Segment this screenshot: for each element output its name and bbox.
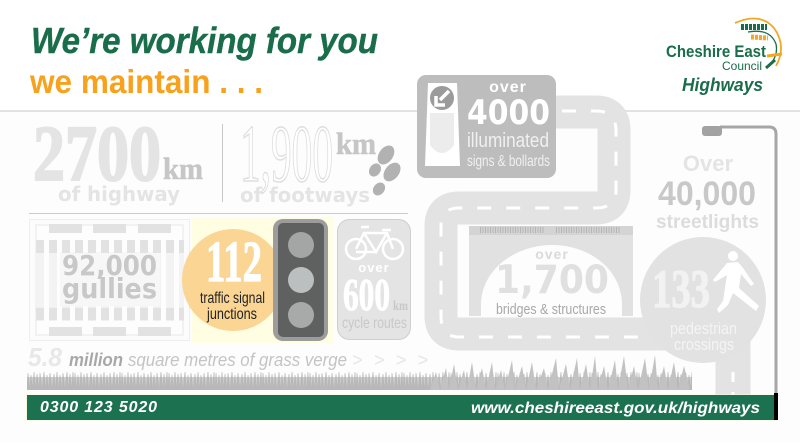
panel: 1,900km of footways: of footways	[240, 183, 370, 207]
panel: 40,000 streetlights: 40,000	[658, 175, 756, 213]
panel: 1,700 bridges and structures: bridges & structures	[496, 301, 606, 318]
panel: illuminated signs and bollards: 4000	[467, 93, 550, 133]
panel: 40,000 streetlights	[656, 151, 759, 233]
panel: 600km cycle routes: cycle routes	[342, 315, 407, 332]
panel: 112 traffic signal junctions: traffic signal	[200, 290, 265, 307]
title: We’re working for you	[31, 20, 378, 61]
footer bar: www.cheshireeast.gov.uk/highways	[471, 400, 760, 417]
icon: street light	[702, 126, 778, 420]
panel: 1,700 bridges and structures: 1,700	[495, 258, 609, 303]
panel: 112 traffic signal junctions	[182, 217, 333, 343]
grass verge caption	[28, 342, 428, 372]
logo: Cheshire East Council Highways	[666, 19, 782, 95]
grass verge caption: million	[69, 350, 123, 370]
panel: illuminated signs and bollards	[417, 75, 556, 178]
footer bar: 0300 123 5020	[40, 399, 157, 416]
panel: 600km cycle routes: over	[358, 260, 390, 275]
panel: 40,000 streetlights: streetlights	[656, 212, 759, 233]
panel: 1,900km of footways	[240, 108, 376, 207]
panel: 600km cycle routes	[338, 220, 410, 340]
icon: traffic light	[273, 219, 328, 341]
grass verge caption: 5.8	[28, 342, 62, 372]
logo: Cheshire East Council Highways: Cheshire East	[666, 42, 766, 61]
panel: 133 pedestrian crossings: pedestrian	[670, 319, 737, 338]
panel: illuminated signs and bollards: illuminated	[467, 130, 549, 152]
logo: Cheshire East Council Highways: Council	[722, 59, 762, 73]
panel: 112 traffic signal junctions: junctions	[206, 306, 257, 323]
footer bar	[26, 393, 778, 420]
icon: footprints	[367, 143, 403, 197]
panel: 133 pedestrian crossings: crossings	[674, 335, 734, 354]
panel: 112 traffic signal junctions: 112	[206, 229, 262, 294]
panel: 2700km of highway: km	[163, 151, 203, 186]
panel: 2700km of highway: 2700	[33, 111, 161, 198]
panel: 1,900km of footways: 1,900	[240, 108, 333, 199]
panel: illuminated signs and bollards: over	[489, 79, 527, 96]
panel: 1,900km of footways: km	[336, 126, 376, 161]
panel: 600km cycle routes: km	[393, 299, 408, 314]
logo: Cheshire East Council Highways: Highways	[682, 75, 763, 95]
panel: 600km cycle routes: 600	[343, 269, 390, 320]
panel: 1,700 bridges and structures: over	[535, 246, 569, 262]
panel: 92,000 gullies: 92,000	[62, 249, 157, 282]
panel: 40,000 streetlights: Over	[683, 151, 734, 176]
panel: 2700km of highway: of highway	[58, 182, 180, 206]
grass	[27, 355, 692, 390]
grass verge caption: square metres of grass verge	[128, 350, 347, 370]
panel: illuminated signs and bollards: signs & bollards	[467, 153, 550, 170]
road	[441, 111, 733, 395]
panel: 92,000 gullies: gullies	[62, 272, 157, 305]
panel: 133 pedestrian crossings	[640, 237, 766, 363]
grass verge caption: > > > >	[352, 350, 428, 370]
panel: 92,000 gullies	[30, 220, 190, 340]
panel: 133 pedestrian crossings: 133	[652, 259, 710, 319]
panel: 1,700 bridges and structures	[469, 226, 633, 318]
subtitle: we maintain . . .	[29, 63, 263, 100]
